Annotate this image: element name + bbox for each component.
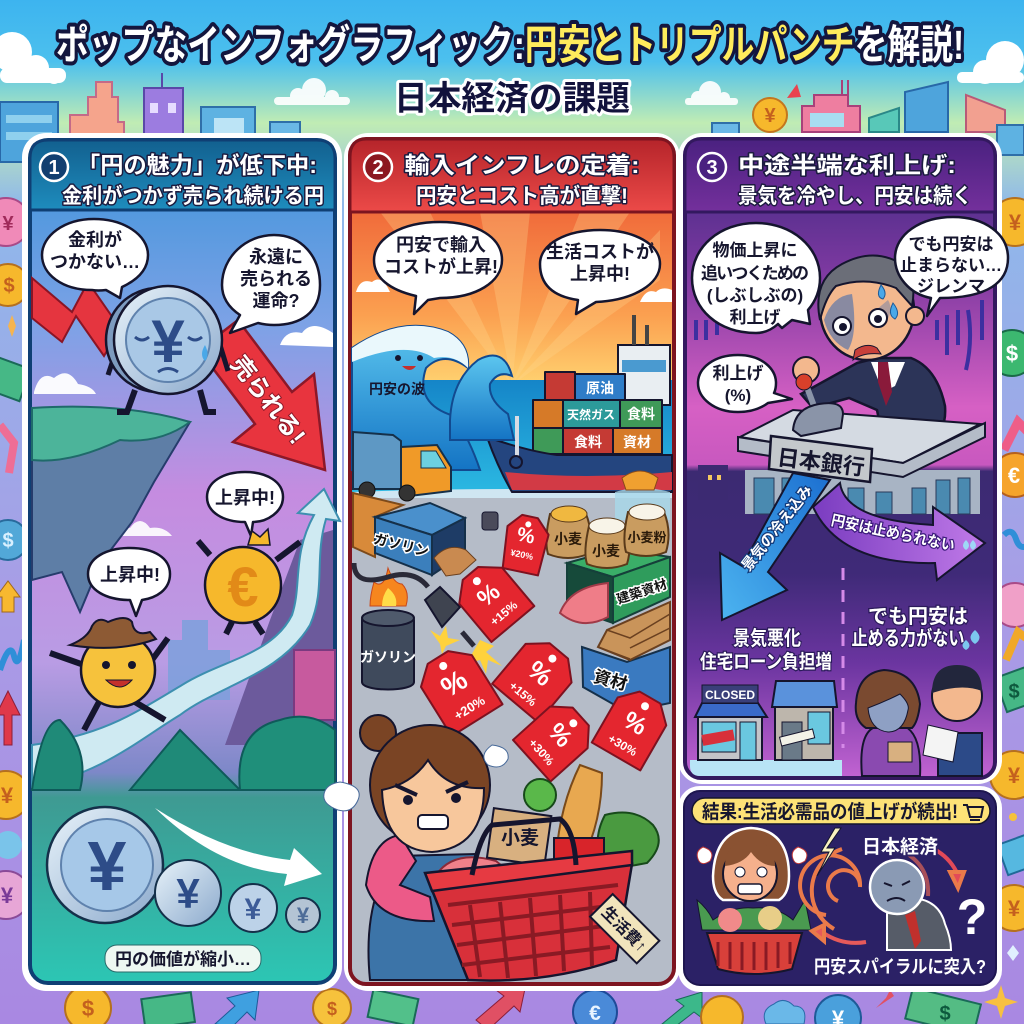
panel 2 header: 円安とコスト高が直撃! bbox=[416, 184, 628, 208]
speech bubble: no interest: 金利が bbox=[68, 229, 122, 250]
cliff bbox=[32, 407, 190, 612]
panel 3: half-hearted rate hike bbox=[678, 133, 1008, 784]
panel 3 header: 3 bbox=[706, 157, 718, 179]
panel 1 header: 金利がつかず売られ続ける円 bbox=[62, 184, 324, 208]
price tags: % bbox=[542, 718, 578, 753]
worried couple bbox=[856, 665, 982, 776]
cargo containers, sacks and goods bbox=[353, 493, 670, 712]
cargo containers, sacks and goods: 建築資材 bbox=[615, 576, 669, 607]
decorative money icons around the border: $ bbox=[2, 530, 14, 552]
panel 3 header: 景気を冷やし、円安は続く bbox=[738, 185, 972, 208]
blue arrow: economic slowdown: 景気の冷え込み bbox=[738, 481, 816, 575]
clouds and zigzag red arrow bbox=[32, 278, 333, 536]
speech bubble: doomed bbox=[222, 235, 320, 333]
plug and sparks bbox=[354, 563, 502, 674]
yen coin character: ¥ bbox=[151, 308, 185, 375]
frozen closed shops: CLOSED bbox=[705, 688, 755, 702]
panel 1: yen attractiveness bbox=[22, 133, 342, 991]
price tags: +30% bbox=[526, 736, 557, 769]
panel 2 header: 2 bbox=[372, 157, 384, 179]
speech bubble: doomed: 売られる bbox=[240, 269, 312, 289]
cargo containers, sacks and goods: ガソリン bbox=[372, 530, 430, 560]
caption: yen value shrinking: 円の価値が縮小… bbox=[115, 949, 251, 969]
speech bubble: reluctant hike: 利上げ bbox=[730, 308, 780, 327]
speech bubble: doomed: 永遠に bbox=[249, 247, 303, 267]
decorative money icons around the border: $ bbox=[82, 996, 94, 1021]
dollar coin character with cowboy hat bbox=[50, 618, 168, 730]
decorative money icons around the border: $ bbox=[1006, 341, 1018, 366]
purple arrow: cannot stop: 円安は止められない bbox=[830, 511, 956, 555]
big red arrow with text: 売られる! bbox=[225, 351, 310, 450]
shrinking yen coins: ¥ bbox=[297, 903, 310, 928]
tag: cost of living: 生活費↑ bbox=[598, 903, 650, 956]
panel 1 header: 1 bbox=[48, 157, 60, 179]
speech bubble: rate bbox=[698, 355, 792, 412]
angry shopper with groceries bbox=[697, 828, 811, 974]
background: clouds and city skyline: ¥ bbox=[764, 105, 776, 127]
panel 2: imported inflation bbox=[324, 133, 680, 991]
ship with containers bbox=[487, 315, 672, 520]
bubble: rising (euro) bbox=[207, 472, 283, 536]
cargo containers, sacks and goods: 小麦粉 bbox=[627, 530, 667, 545]
drips and night city silhouette bbox=[696, 300, 982, 500]
big red arrow with text bbox=[199, 320, 325, 470]
purple arrow: cannot stop bbox=[813, 483, 985, 580]
central banker bbox=[793, 255, 945, 449]
bubble: import cost: 円安で輸入 bbox=[396, 235, 486, 255]
bubble: living cost: 上昇中! bbox=[570, 264, 630, 284]
bank building: 日本銀行 bbox=[776, 445, 866, 480]
panel 2 header bbox=[350, 139, 674, 212]
speech bubble: dilemma: でも円安は bbox=[908, 235, 994, 254]
bubble: import cost bbox=[374, 222, 502, 314]
ship with containers: 天然ガス bbox=[567, 407, 615, 422]
gasoline barrel with flame: ガソリン bbox=[360, 649, 416, 665]
tag: cost of living bbox=[590, 894, 659, 963]
basket of goods bbox=[425, 765, 659, 981]
text: Japanese economy: 日本経済 bbox=[862, 836, 938, 858]
decorative money icons around the border: ¥ bbox=[2, 213, 14, 235]
angry shopper with basket bbox=[324, 715, 508, 980]
text: recession: 住宅ローン負担増 bbox=[700, 650, 832, 673]
speech bubble: reluctant hike: 追いつくための bbox=[701, 264, 809, 283]
exhausted man bbox=[870, 860, 951, 950]
spiral bbox=[800, 842, 964, 943]
price tags bbox=[412, 512, 674, 782]
speech bubble: reluctant hike: (しぶしぶの) bbox=[707, 286, 803, 305]
panel 1 header: 「円の魅力」が低下中: bbox=[77, 152, 317, 178]
frozen closed shops bbox=[690, 681, 842, 776]
speech bubble: rate: 利上げ bbox=[712, 364, 764, 383]
panel 3 header bbox=[685, 139, 995, 212]
background: clouds and city skyline bbox=[0, 32, 1024, 168]
euro coin character: € bbox=[227, 555, 259, 618]
panel 2 header: 輸入インフレの定着: bbox=[404, 152, 640, 178]
text: powerless: 止める力がない bbox=[852, 626, 964, 650]
decorative money icons around the border: ¥ bbox=[1, 883, 14, 908]
price tags: % bbox=[435, 664, 473, 703]
subtitle: 日本経済の課題 bbox=[394, 80, 630, 118]
blue arrow: economic slowdown bbox=[720, 473, 830, 620]
decorative money icons around the border: ¥ bbox=[1008, 763, 1021, 788]
bubble: rising (dollar) bbox=[88, 548, 170, 616]
dashed divider bbox=[842, 568, 844, 748]
basket of goods: 小麦 bbox=[501, 827, 539, 849]
decorative money icons around the border: $ bbox=[3, 275, 15, 297]
cargo containers, sacks and goods: 小麦 bbox=[554, 531, 582, 547]
speech bubble: doomed: 運命? bbox=[252, 291, 300, 311]
question mark: ? bbox=[957, 889, 987, 945]
price tags: % bbox=[472, 578, 506, 613]
bubble: living cost: 生活コストが bbox=[546, 241, 654, 262]
shrinking yen coins: ¥ bbox=[88, 827, 127, 905]
price tags: +20% bbox=[451, 692, 488, 723]
euro coin character bbox=[198, 529, 300, 634]
ship with containers: 食料 bbox=[627, 406, 655, 422]
text: yen spiral: 円安スパイラルに突入? bbox=[814, 957, 986, 977]
decorative money icons around the border: ¥ bbox=[1009, 210, 1022, 235]
ship with containers: 資材 bbox=[623, 434, 651, 450]
shrinking yen coins: ¥ bbox=[176, 870, 200, 917]
waves: 円安の波 bbox=[369, 381, 425, 397]
title: ポップなインフォグラフィック:円安とトリプルパンチを解説! bbox=[56, 22, 964, 68]
price tags: +15% bbox=[487, 598, 520, 629]
result banner: 結果:生活必需品の値上げが続出! bbox=[702, 800, 958, 823]
price tags: % bbox=[515, 523, 537, 549]
bubble: rising (euro): 上昇中! bbox=[215, 488, 275, 508]
lightning bbox=[817, 828, 841, 876]
price tags: +15% bbox=[506, 679, 539, 709]
lever bbox=[793, 374, 843, 436]
price tags: % bbox=[618, 706, 652, 741]
price tags: +30% bbox=[606, 731, 640, 759]
speech bubble: dilemma: ジレンマ bbox=[917, 277, 985, 296]
speech bubble: reluctant hike bbox=[692, 223, 820, 333]
panel 3 header: 中途半端な利上げ: bbox=[738, 152, 956, 178]
ship with containers: 食料 bbox=[574, 434, 602, 450]
panel 1 header bbox=[30, 140, 335, 210]
ship with containers: 原油 bbox=[586, 380, 614, 396]
text: powerless: でも円安は bbox=[868, 605, 968, 628]
cargo containers, sacks and goods: 小麦 bbox=[592, 543, 620, 559]
bank building bbox=[738, 410, 985, 514]
speech bubble: no interest bbox=[42, 219, 148, 298]
text: recession: 景気悪化 bbox=[733, 627, 801, 650]
bubble: living cost bbox=[540, 230, 660, 314]
decorative money icons around the border: ¥ bbox=[1, 783, 14, 808]
text: recession bbox=[700, 627, 832, 673]
speech bubble: reluctant hike: 物価上昇に bbox=[712, 241, 798, 260]
bubble: import cost: コストが上昇! bbox=[384, 256, 498, 277]
text: powerless bbox=[852, 605, 980, 650]
shrinking yen coins: ¥ bbox=[245, 893, 262, 926]
cargo containers, sacks and goods: 資材 bbox=[592, 667, 629, 694]
decorative money icons around the border: € bbox=[1008, 463, 1020, 488]
decorative money icons around the border: $ bbox=[1008, 681, 1020, 703]
decorative money icons around the border: $ bbox=[327, 999, 337, 1019]
decorative money icons around the border: ¥ bbox=[1008, 896, 1021, 921]
skyline, hills and rising path bbox=[32, 489, 340, 790]
bubble: rising (dollar): 上昇中! bbox=[100, 565, 160, 585]
sunrise sky and sea bbox=[352, 210, 672, 498]
truck bbox=[353, 432, 451, 501]
yen coin character bbox=[106, 286, 228, 412]
shrinking yen coins bbox=[47, 807, 320, 932]
price tags: ¥20% bbox=[510, 547, 534, 562]
gasoline barrel with flame bbox=[360, 568, 416, 690]
speech bubble: dilemma bbox=[895, 217, 1008, 316]
speech bubble: dilemma: 止まらない… bbox=[900, 256, 1002, 275]
price tags: % bbox=[522, 654, 559, 692]
speech bubble: rate: (%) bbox=[725, 386, 751, 405]
waves bbox=[352, 326, 514, 470]
white arrow bbox=[155, 808, 322, 886]
speech bubble: no interest: つかない… bbox=[50, 252, 140, 272]
caption: yen value shrinking bbox=[105, 945, 261, 972]
panel: result bbox=[678, 786, 1002, 992]
